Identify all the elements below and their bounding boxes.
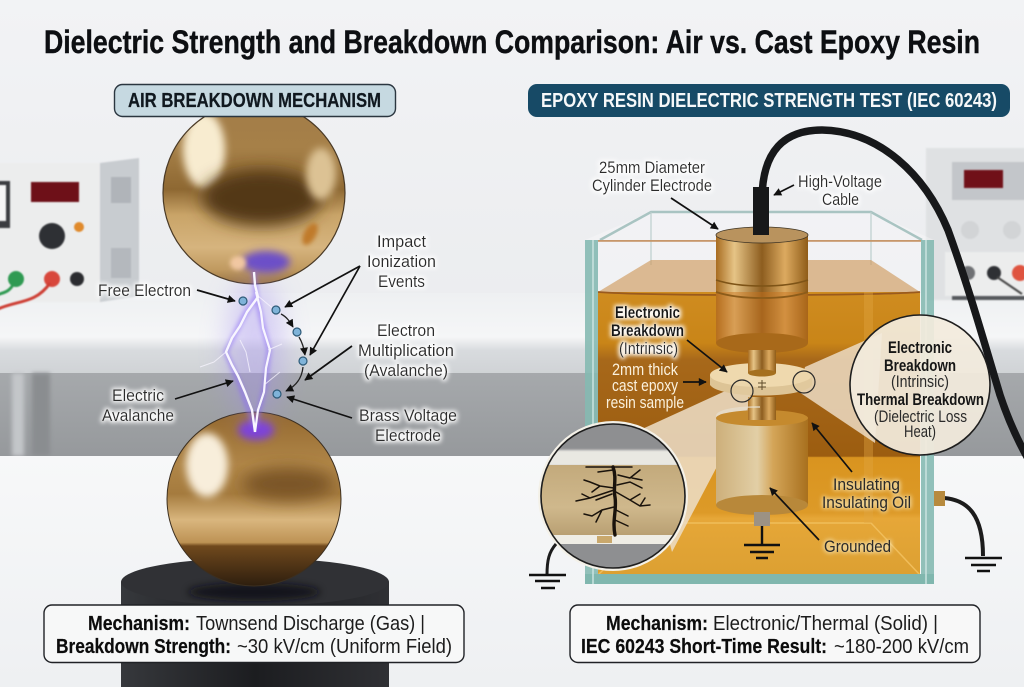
insulating oil and grounded labels: Grounded (824, 537, 891, 556)
bottom brass sphere (167, 412, 341, 586)
sample thickness label (606, 361, 684, 412)
high-voltage cable (761, 130, 1024, 462)
left panel labels: Events (378, 272, 425, 291)
insulating oil and grounded labels (822, 475, 911, 556)
left panel labels: Electrode (375, 426, 441, 445)
left panel labels: Impact (377, 232, 426, 251)
sample thickness label: cast epoxy (612, 377, 679, 395)
left panel labels: Avalanche (102, 406, 174, 425)
electronic breakdown label (611, 304, 684, 358)
ionization electron 3 (299, 357, 307, 365)
right panel upper labels: High-Voltage (798, 172, 882, 191)
electronic breakdown label: Breakdown (611, 322, 684, 340)
right result box: IEC 60243 Short-Time Result: (581, 635, 827, 658)
left panel labels: Electron (377, 321, 435, 340)
sample thickness label: 2mm thick (612, 361, 679, 379)
free electron (239, 297, 247, 305)
inset: breakdown text circle (850, 315, 990, 455)
inset: breakdown text circle: Thermal Breakdown (857, 391, 984, 409)
inset: breakdown text circle: (Intrinsic) (891, 373, 949, 391)
left panel labels: Electric (112, 386, 164, 405)
left result box: Breakdown Strength: (56, 635, 231, 658)
inset: breakdown text circle: Electronic (888, 339, 952, 357)
tank glass walls (585, 240, 934, 584)
glass tank back (585, 212, 934, 584)
right panel upper labels: Cable (822, 190, 859, 209)
right panel upper labels: 25mm Diameter (599, 158, 705, 177)
insulating oil and grounded labels: Insulating (833, 475, 900, 494)
left panel labels: Free Electron (98, 281, 191, 300)
tank ground connector and symbol (934, 491, 1002, 571)
magnifier cones (640, 333, 882, 552)
left panel labels: Multiplication (358, 341, 454, 360)
right result box: Mechanism: (606, 612, 708, 635)
right result box: ~180-200 kV/cm (834, 635, 969, 658)
left result box: Mechanism: (88, 612, 190, 635)
inset: breakdown text circle: (Dielectric Loss (874, 408, 967, 426)
left panel labels: Ionization (367, 252, 436, 271)
insulating oil (598, 260, 920, 575)
electronic breakdown label: (Intrinsic) (619, 340, 678, 358)
electron chain (239, 297, 307, 398)
right panel upper labels: Cylinder Electrode (592, 176, 712, 195)
inset: electrical tree (535, 420, 691, 572)
left panel labels: Brass Voltage (359, 406, 457, 425)
right result box (570, 605, 980, 662)
left panel labels: (Avalanche) (364, 361, 448, 380)
right panel upper labels (592, 158, 882, 209)
left result box: ~30 kV/cm (Uniform Field) (237, 635, 452, 658)
top brass sphere (163, 102, 345, 284)
inset ground symbol (529, 544, 566, 588)
left heading (114, 84, 396, 116)
right power supply instrument (926, 148, 1024, 300)
upper cylinder electrode (716, 227, 808, 353)
right heading (528, 84, 1010, 117)
lower cylinder electrode (716, 406, 808, 515)
resin sample disc (710, 356, 812, 396)
ionization electron 4 (273, 390, 281, 398)
insulating oil and grounded labels: Insulating Oil (822, 493, 911, 512)
ionization electron 2 (293, 328, 301, 336)
left power supply instrument (0, 158, 139, 310)
inset: breakdown text circle: Breakdown (884, 357, 956, 375)
lightning discharge (200, 272, 283, 432)
sample thickness label: resin sample (606, 394, 684, 412)
right panel arrows (671, 185, 852, 540)
small magnifier circles (731, 371, 815, 402)
inset: breakdown text circle: Heat) (904, 423, 936, 441)
right result box: Electronic/Thermal (Solid) | (713, 612, 938, 635)
left panel arrows (175, 266, 360, 418)
electronic breakdown label: Electronic (615, 304, 680, 322)
left heading: AIR BREAKDOWN MECHANISM (128, 89, 381, 112)
grounded stem and symbol (744, 512, 780, 558)
ionization electron 1 (272, 306, 280, 314)
left panel labels (98, 232, 457, 445)
pedestal (121, 558, 389, 687)
left result box: Townsend Discharge (Gas) | (196, 612, 425, 635)
lower electrode stem (748, 397, 776, 419)
left result box (44, 605, 464, 662)
upper electrode stem (748, 350, 776, 374)
